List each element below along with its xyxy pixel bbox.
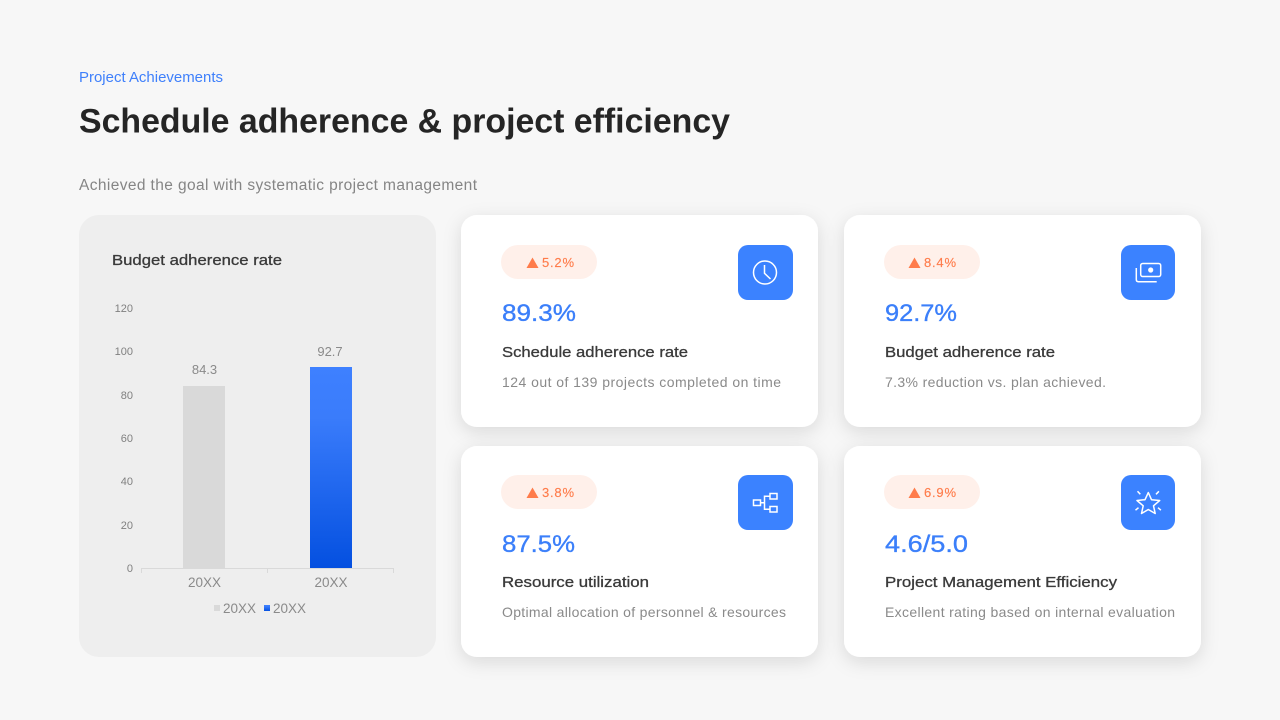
- legend: 20XX: [223, 601, 256, 616]
- icon: clock: [738, 245, 793, 300]
- change badge: 3.8%: [542, 485, 574, 500]
- icon: star: [1121, 475, 1175, 530]
- category labels: 20XX: [314, 575, 348, 590]
- description: Optimal allocation of personnel & resources: [502, 604, 786, 620]
- change badge: [501, 245, 597, 279]
- description: 124 out of 139 projects completed on time: [502, 374, 781, 390]
- metric name: Budget adherence rate: [885, 344, 1055, 361]
- category labels: [188, 575, 348, 590]
- change badge: 8.4%: [924, 255, 956, 270]
- panel: schedule adherence card: [461, 215, 818, 427]
- eyebrow label: Project Achievements: [79, 70, 223, 86]
- metric name: Resource utilization: [502, 574, 649, 591]
- title: Schedule adherence & project efficiency: [79, 102, 730, 140]
- y axis labels: [115, 303, 133, 575]
- subtitle: Achieved the goal with systematic project management: [79, 177, 478, 194]
- change badge: 5.2%: [542, 255, 574, 270]
- y axis labels: 60: [121, 433, 133, 445]
- legend: 20XX: [273, 601, 306, 616]
- metric name: Schedule adherence rate: [502, 344, 688, 361]
- value label blue: 92.7: [317, 344, 343, 359]
- change badge: [884, 245, 980, 279]
- y axis labels: 100: [115, 346, 133, 358]
- description: Excellent rating based on internal evaluation: [885, 604, 1175, 620]
- y axis labels: 20: [121, 520, 133, 532]
- metric name: Project Management Efficiency: [885, 574, 1118, 591]
- panel: budget chart: [79, 215, 436, 657]
- legend: [214, 601, 306, 616]
- value label grey: 84.3: [192, 362, 217, 377]
- metric value: 89.3%: [502, 300, 576, 327]
- category labels: 20XX: [188, 575, 221, 590]
- y axis labels: 0: [127, 563, 133, 575]
- chart title: Budget adherence rate: [112, 252, 282, 269]
- icon: money: [1121, 245, 1175, 300]
- change badge: [884, 475, 980, 509]
- description: 7.3% reduction vs. plan achieved.: [885, 374, 1106, 390]
- bar: 20XX blue: [310, 367, 352, 568]
- panel: project management efficiency card: [844, 446, 1201, 657]
- bar: 20XX grey: [183, 386, 225, 568]
- metric value: 87.5%: [502, 531, 575, 558]
- change badge: [501, 475, 597, 509]
- icon: hierarchy: [738, 475, 793, 530]
- y axis labels: 40: [121, 476, 133, 488]
- panel: budget adherence card: [844, 215, 1201, 427]
- y axis labels: 80: [121, 390, 133, 402]
- bar chart: [115, 303, 394, 616]
- change badge: 6.9%: [924, 485, 956, 500]
- y axis labels: 120: [115, 303, 133, 315]
- metric value: 92.7%: [885, 300, 957, 327]
- panel: resource utilization card: [461, 446, 818, 657]
- metric value: 4.6/5.0: [885, 531, 968, 558]
